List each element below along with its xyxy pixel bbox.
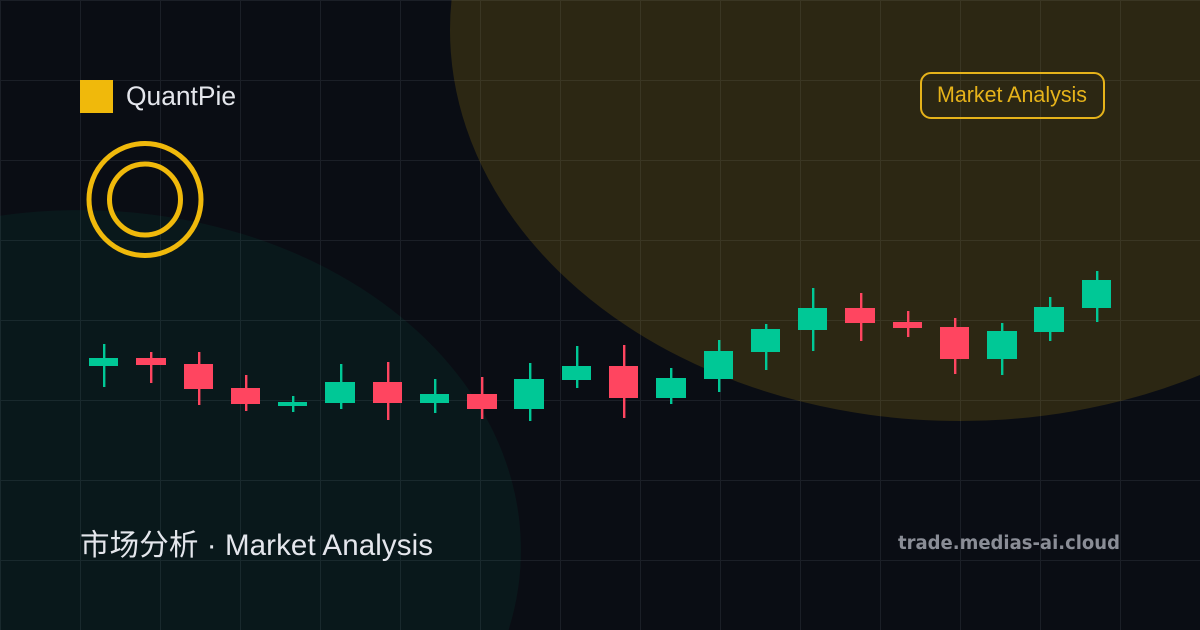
- candle 1: [89, 344, 118, 387]
- candle 9: [467, 377, 497, 419]
- candle 20: [987, 323, 1017, 375]
- candle 16: [798, 288, 827, 351]
- candle 3: [184, 352, 213, 405]
- headline: 市场分析 · Market Analysis: [80, 529, 433, 562]
- candle 5: [278, 396, 307, 412]
- candlestick chart: [89, 271, 1111, 421]
- candle 19: [940, 318, 969, 374]
- candle 10: [514, 363, 544, 421]
- candle 2: [136, 352, 166, 383]
- candle 7: [373, 362, 402, 420]
- candle 6: [325, 364, 355, 409]
- candle 21: [1034, 297, 1064, 341]
- candle 14: [704, 340, 733, 392]
- candle 22: [1082, 271, 1111, 322]
- gold background ellipse: [450, 0, 1200, 421]
- candle 18: [893, 311, 922, 337]
- site url: trade.medias-ai.cloud: [898, 533, 1120, 554]
- candle 12: [609, 345, 638, 418]
- candle 13: [656, 368, 686, 404]
- badge: Market Analysis: [921, 73, 1104, 118]
- badge: Market Analysis: Market Analysis: [937, 82, 1087, 107]
- candle 4: [231, 375, 260, 411]
- candle 8: [420, 379, 449, 413]
- candle 17: [845, 293, 875, 341]
- candle 11: [562, 346, 591, 388]
- brand name: QuantPie: [126, 81, 236, 111]
- teal background ellipse: [0, 210, 521, 630]
- logo mark: [80, 80, 113, 113]
- icon: concentric rings: [89, 144, 201, 256]
- candle 15: [751, 324, 780, 370]
